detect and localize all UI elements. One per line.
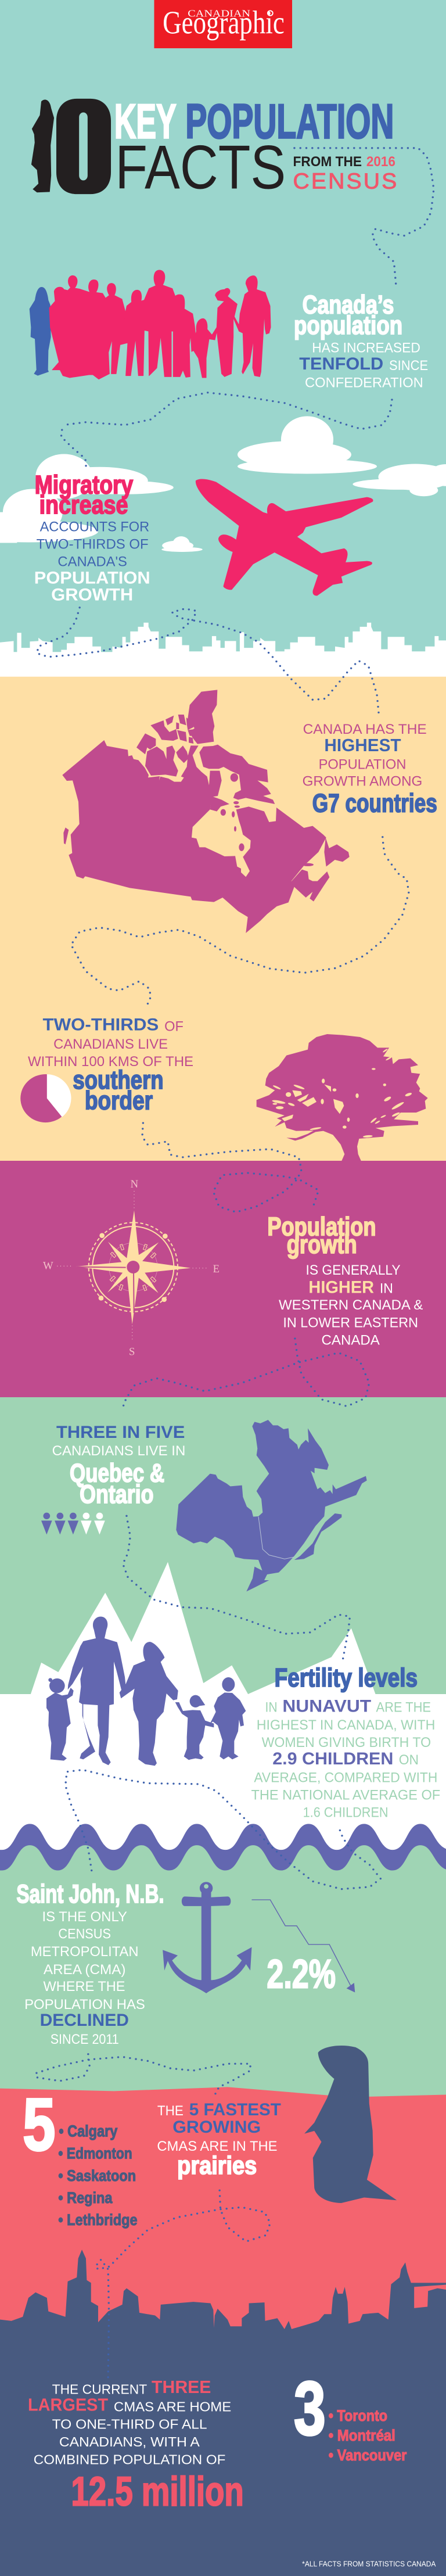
blue figure [30, 287, 51, 376]
text: Saint John: POPULATION HAS [24, 1997, 145, 2012]
text: population tenfold: CONFEDERATION [305, 375, 423, 390]
dotted path segment [71, 860, 409, 1006]
text: Quebec and Ontario: THREE IN FIVE [56, 1423, 185, 1442]
icon: airplane [196, 479, 373, 595]
text: Saint John: CENSUS [58, 1926, 111, 1942]
arrow: decline line [251, 1900, 355, 1993]
text: Saint John: Saint John, N.B. [16, 1879, 164, 1908]
red backdrop [0, 2150, 446, 2340]
dotted path segment [35, 2054, 250, 2094]
text: population tenfold [294, 290, 428, 390]
text: fertility levels: ON [399, 1752, 419, 1768]
list: fastest growing CMAs (lower part): • Lethbridge [58, 2211, 138, 2229]
logo: Geographic [163, 5, 285, 41]
heading line: from the 2016 census: 2016 [366, 154, 395, 170]
text: Saint John: IS THE ONLY [42, 1909, 127, 1925]
text: bottom statement: LARGEST [28, 2394, 108, 2414]
logo [154, 0, 292, 48]
list: fastest growing CMAs (lower part): • Saskatoon [58, 2166, 136, 2184]
stat: 2.2 percent: 2.2% [267, 1952, 336, 1997]
text: bottom statement: 12.5 million [71, 2469, 244, 2514]
heading line: from the 2016 census: CENSUS [293, 169, 397, 193]
icon: three in five people [41, 1513, 105, 1534]
text: population growth: HIGHER [308, 1278, 374, 1297]
boy [210, 1677, 246, 1759]
crowd [49, 270, 271, 379]
text: prairies: prairies [177, 2151, 257, 2180]
heading line: facts: FACTS [115, 133, 286, 202]
father [68, 1617, 126, 1765]
text: population growth: WESTERN CANADA & [279, 1297, 423, 1313]
text: population growth [267, 1212, 423, 1348]
text: population growth: IN [380, 1281, 393, 1296]
family silhouettes: population [30, 270, 271, 379]
text: population growth: IS GENERALLY [306, 1262, 401, 1278]
text: fertility levels: IN [265, 1700, 278, 1716]
text: Quebec and Ontario: Ontario [80, 1480, 153, 1509]
numeral 3: 3 [294, 2366, 326, 2451]
big zero [56, 99, 111, 194]
list: fastest growing CMAs (lower part): • Edmonton [58, 2144, 132, 2162]
text: fertility levels: NUNAVUT [282, 1697, 371, 1716]
map: Quebec and Ontario [176, 1420, 367, 1591]
list: fastest growing CMAs: • Calgary [59, 2122, 118, 2140]
text: population growth: CANADA [321, 1333, 380, 1348]
text: southern border: border [85, 1086, 153, 1115]
waves [0, 1824, 446, 1884]
text: population growth: Population [267, 1212, 376, 1241]
text: fertility levels: 1.6 CHILDREN [303, 1805, 389, 1820]
dotted path segment [95, 2190, 270, 2378]
icon: compass rose: E [213, 1263, 220, 1275]
text: five fastest growing: CMAS ARE IN THE [157, 2139, 278, 2154]
text: Saint John: WHERE THE [43, 1979, 125, 1994]
text: fertility levels [251, 1663, 440, 1820]
text: bottom statement: CMAS ARE HOME [114, 2399, 231, 2414]
text: migratory increase: POPULATION [34, 569, 150, 587]
text: migratory increase: CANADA'S [57, 554, 127, 569]
icon: woman silhouette forming the 1 [31, 99, 54, 192]
list: fastest growing CMAs (lower part): • Regina [58, 2189, 113, 2207]
text: fertility levels: 2.9 CHILDREN [272, 1749, 393, 1768]
dotted path segment [383, 837, 386, 858]
dotted path segment [66, 1770, 380, 1889]
text: fertility levels: HIGHEST IN CANADA, WITH [257, 1717, 435, 1733]
text: G7 growth: POPULATION [319, 757, 406, 772]
text: population growth: growth [287, 1230, 357, 1259]
list: largest CMAs: • Toronto [329, 2407, 387, 2424]
heading line: from the 2016 census [293, 154, 397, 193]
clouds [0, 416, 446, 552]
text: migratory increase: increase [39, 490, 128, 519]
icon: compass rose [43, 1178, 220, 1358]
family silhouette [46, 1617, 246, 1766]
dotted path segment [142, 1123, 319, 1212]
text: fertility levels: THE NATIONAL AVERAGE OF [251, 1788, 440, 1803]
text: migratory increase: GROWTH [51, 586, 133, 604]
left child [46, 1678, 74, 1761]
text: population tenfold: SINCE [389, 358, 428, 374]
text: southern border: OF [164, 1019, 184, 1034]
city skyline [0, 623, 446, 677]
icon: tree [257, 1034, 428, 1161]
text: G7 growth [303, 722, 437, 817]
text: population tenfold: population [294, 311, 402, 340]
text: Saint John: AREA (CMA) [44, 1962, 125, 1978]
mountains [0, 1562, 446, 1852]
small child [175, 1695, 214, 1760]
text: Saint John: METROPOLITAN [31, 1944, 139, 1960]
dotted path segment [37, 608, 379, 715]
footer note: *ALL FACTS FROM STATISTICS CANADA [302, 2560, 436, 2568]
text: fertility levels: WOMEN GIVING BIRTH TO [262, 1735, 431, 1750]
list: fastest growing CMAs (lower part) [58, 2144, 138, 2229]
pie chart: two-thirds [20, 1074, 71, 1122]
dotted path segment [61, 430, 86, 468]
text: bottom statement: CANADIANS, WITH A [59, 2435, 200, 2450]
text: southern border: TWO-THIRDS [42, 1016, 159, 1034]
text: Quebec and Ontario: CANADIANS LIVE IN [52, 1443, 185, 1459]
icon: compass rose: S [129, 1346, 135, 1358]
text: population growth: IN LOWER EASTERN [283, 1315, 418, 1330]
text: five fastest growing [157, 2100, 281, 2154]
map: Canada [62, 690, 350, 933]
red ground band [0, 2087, 446, 2158]
heading line: from the 2016 census: FROM THE [293, 154, 362, 170]
text: bottom statement: TO ONE-THIRD OF ALL [52, 2417, 207, 2433]
text: fertility levels: ARE THE [376, 1700, 431, 1716]
dotted path segment [122, 1339, 369, 1411]
list: largest CMAs: • Montréal [329, 2426, 395, 2444]
text: migratory increase: TWO-THIRDS OF [37, 537, 149, 552]
skyline: city [0, 2249, 446, 2576]
icon: compass rose: W [43, 1260, 53, 1272]
icon: anchor [163, 1882, 251, 1993]
logo: CANADIAN [188, 8, 250, 19]
text: southern border: WITHIN 100 KMS OF THE [28, 1054, 193, 1070]
text: Quebec and Ontario [52, 1423, 185, 1509]
numeral 5: 5 [23, 2083, 56, 2166]
text: G7 growth: CANADA HAS THE [303, 722, 427, 737]
text: southern border: southern [73, 1065, 164, 1095]
title [31, 95, 397, 202]
text: migratory increase: ACCOUNTS FOR [40, 519, 149, 534]
text: Saint John [16, 1879, 164, 2047]
text: five fastest growing: 5 FASTEST [189, 2100, 281, 2119]
text: bottom statement: COMBINED POPULATION OF [34, 2452, 225, 2467]
text: fertility levels: AVERAGE, COMPARED WITH [254, 1770, 437, 1785]
text: five fastest growing: THE [157, 2103, 184, 2119]
dotted path segment [64, 393, 392, 429]
text: population tenfold: TENFOLD [299, 355, 383, 374]
text: Saint John: DECLINED [40, 2011, 129, 2030]
text: migratory increase [34, 470, 150, 604]
list: largest CMAs [329, 2407, 407, 2464]
heading line: key population: KEY [114, 95, 177, 149]
text: southern border: CANADIANS LIVE [53, 1037, 168, 1052]
text: bottom statement: THE CURRENT [52, 2382, 148, 2397]
text: G7 growth: GROWTH AMONG [303, 774, 422, 789]
list: largest CMAs: • Vancouver [329, 2446, 407, 2464]
text: Quebec and Ontario: Quebec & [70, 1458, 164, 1487]
text: bottom statement: THREE [152, 2377, 211, 2397]
icon: groundhog [304, 2046, 397, 2203]
dotted path segment [123, 1516, 350, 1660]
dotted path segment [294, 148, 434, 288]
text: bottom statement [28, 2377, 244, 2514]
mother [120, 1642, 178, 1766]
text: population tenfold: Canada’s [303, 290, 394, 319]
text: Saint John: SINCE 2011 [51, 2032, 119, 2047]
text: G7 growth: HIGHEST [324, 736, 401, 755]
text: population tenfold: HAS INCREASED [312, 340, 420, 356]
text: five fastest growing: GROWING [172, 2118, 261, 2137]
icon: compass rose: N [131, 1178, 139, 1190]
text: migratory increase: Migratory [35, 470, 133, 499]
text: southern border [28, 1016, 193, 1115]
